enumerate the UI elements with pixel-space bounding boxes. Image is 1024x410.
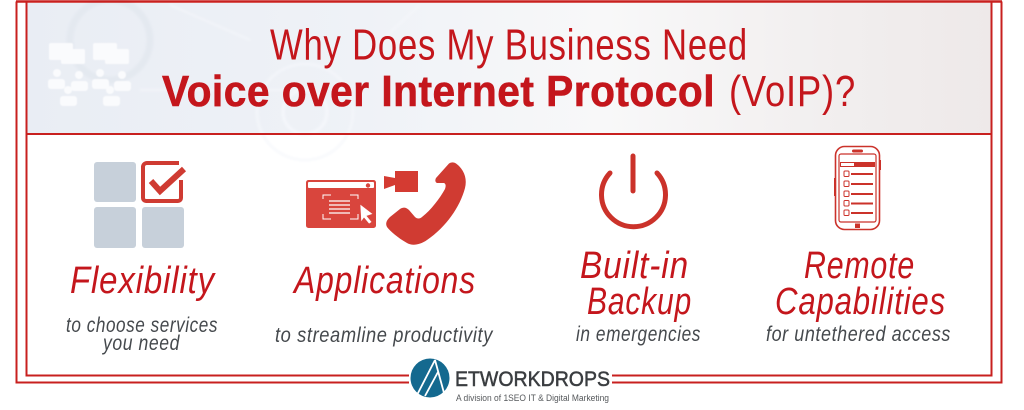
text: flexibility description bbox=[66, 313, 218, 355]
icon: smartphone checklist bbox=[834, 146, 881, 230]
icon: logo circle bbox=[410, 358, 450, 398]
text: brand name: ETWORKDROPS bbox=[455, 368, 610, 391]
heading: built-in backup: Built-in bbox=[580, 245, 689, 287]
icon: browser window, camera and phone bbox=[306, 162, 466, 245]
text: flexibility description: you need bbox=[101, 331, 180, 355]
icon: faint people and speech bubbles bbox=[48, 43, 131, 106]
icon: grid with checkbox bbox=[94, 162, 184, 248]
heading: remote capabilities: Capabilities bbox=[775, 281, 946, 323]
text: tagline: A division of 1SEO IT & Digital Marketing bbox=[456, 393, 609, 403]
heading: flexibility: Flexibility bbox=[70, 260, 216, 302]
text: flexibility description: to choose services bbox=[66, 313, 218, 337]
title line 2: (VoIP)? bbox=[729, 67, 856, 116]
text: applications description: to streamline productivity bbox=[275, 323, 493, 347]
title line 2: Voice over Internet Protocol bbox=[162, 67, 715, 116]
panel: applications bbox=[275, 162, 493, 347]
heading: built-in backup: Backup bbox=[587, 281, 692, 323]
panel: remote capabilities bbox=[766, 146, 951, 346]
heading: applications: Applications bbox=[292, 260, 476, 302]
text: backup description: in emergencies bbox=[576, 322, 701, 346]
panel: header background bbox=[26, 0, 991, 160]
heading: remote capabilities bbox=[775, 245, 946, 323]
title line 1: Why Does My Business Need bbox=[270, 20, 748, 70]
panel: built-in backup bbox=[576, 156, 701, 346]
heading: remote capabilities: Remote bbox=[804, 245, 915, 287]
logo: Networkdrops bbox=[409, 358, 612, 404]
icon: power symbol bbox=[602, 156, 666, 227]
text: remote description: for untethered access bbox=[766, 322, 951, 346]
title bbox=[162, 20, 856, 116]
panel: flexibility bbox=[66, 162, 218, 355]
heading: built-in backup bbox=[580, 245, 692, 323]
